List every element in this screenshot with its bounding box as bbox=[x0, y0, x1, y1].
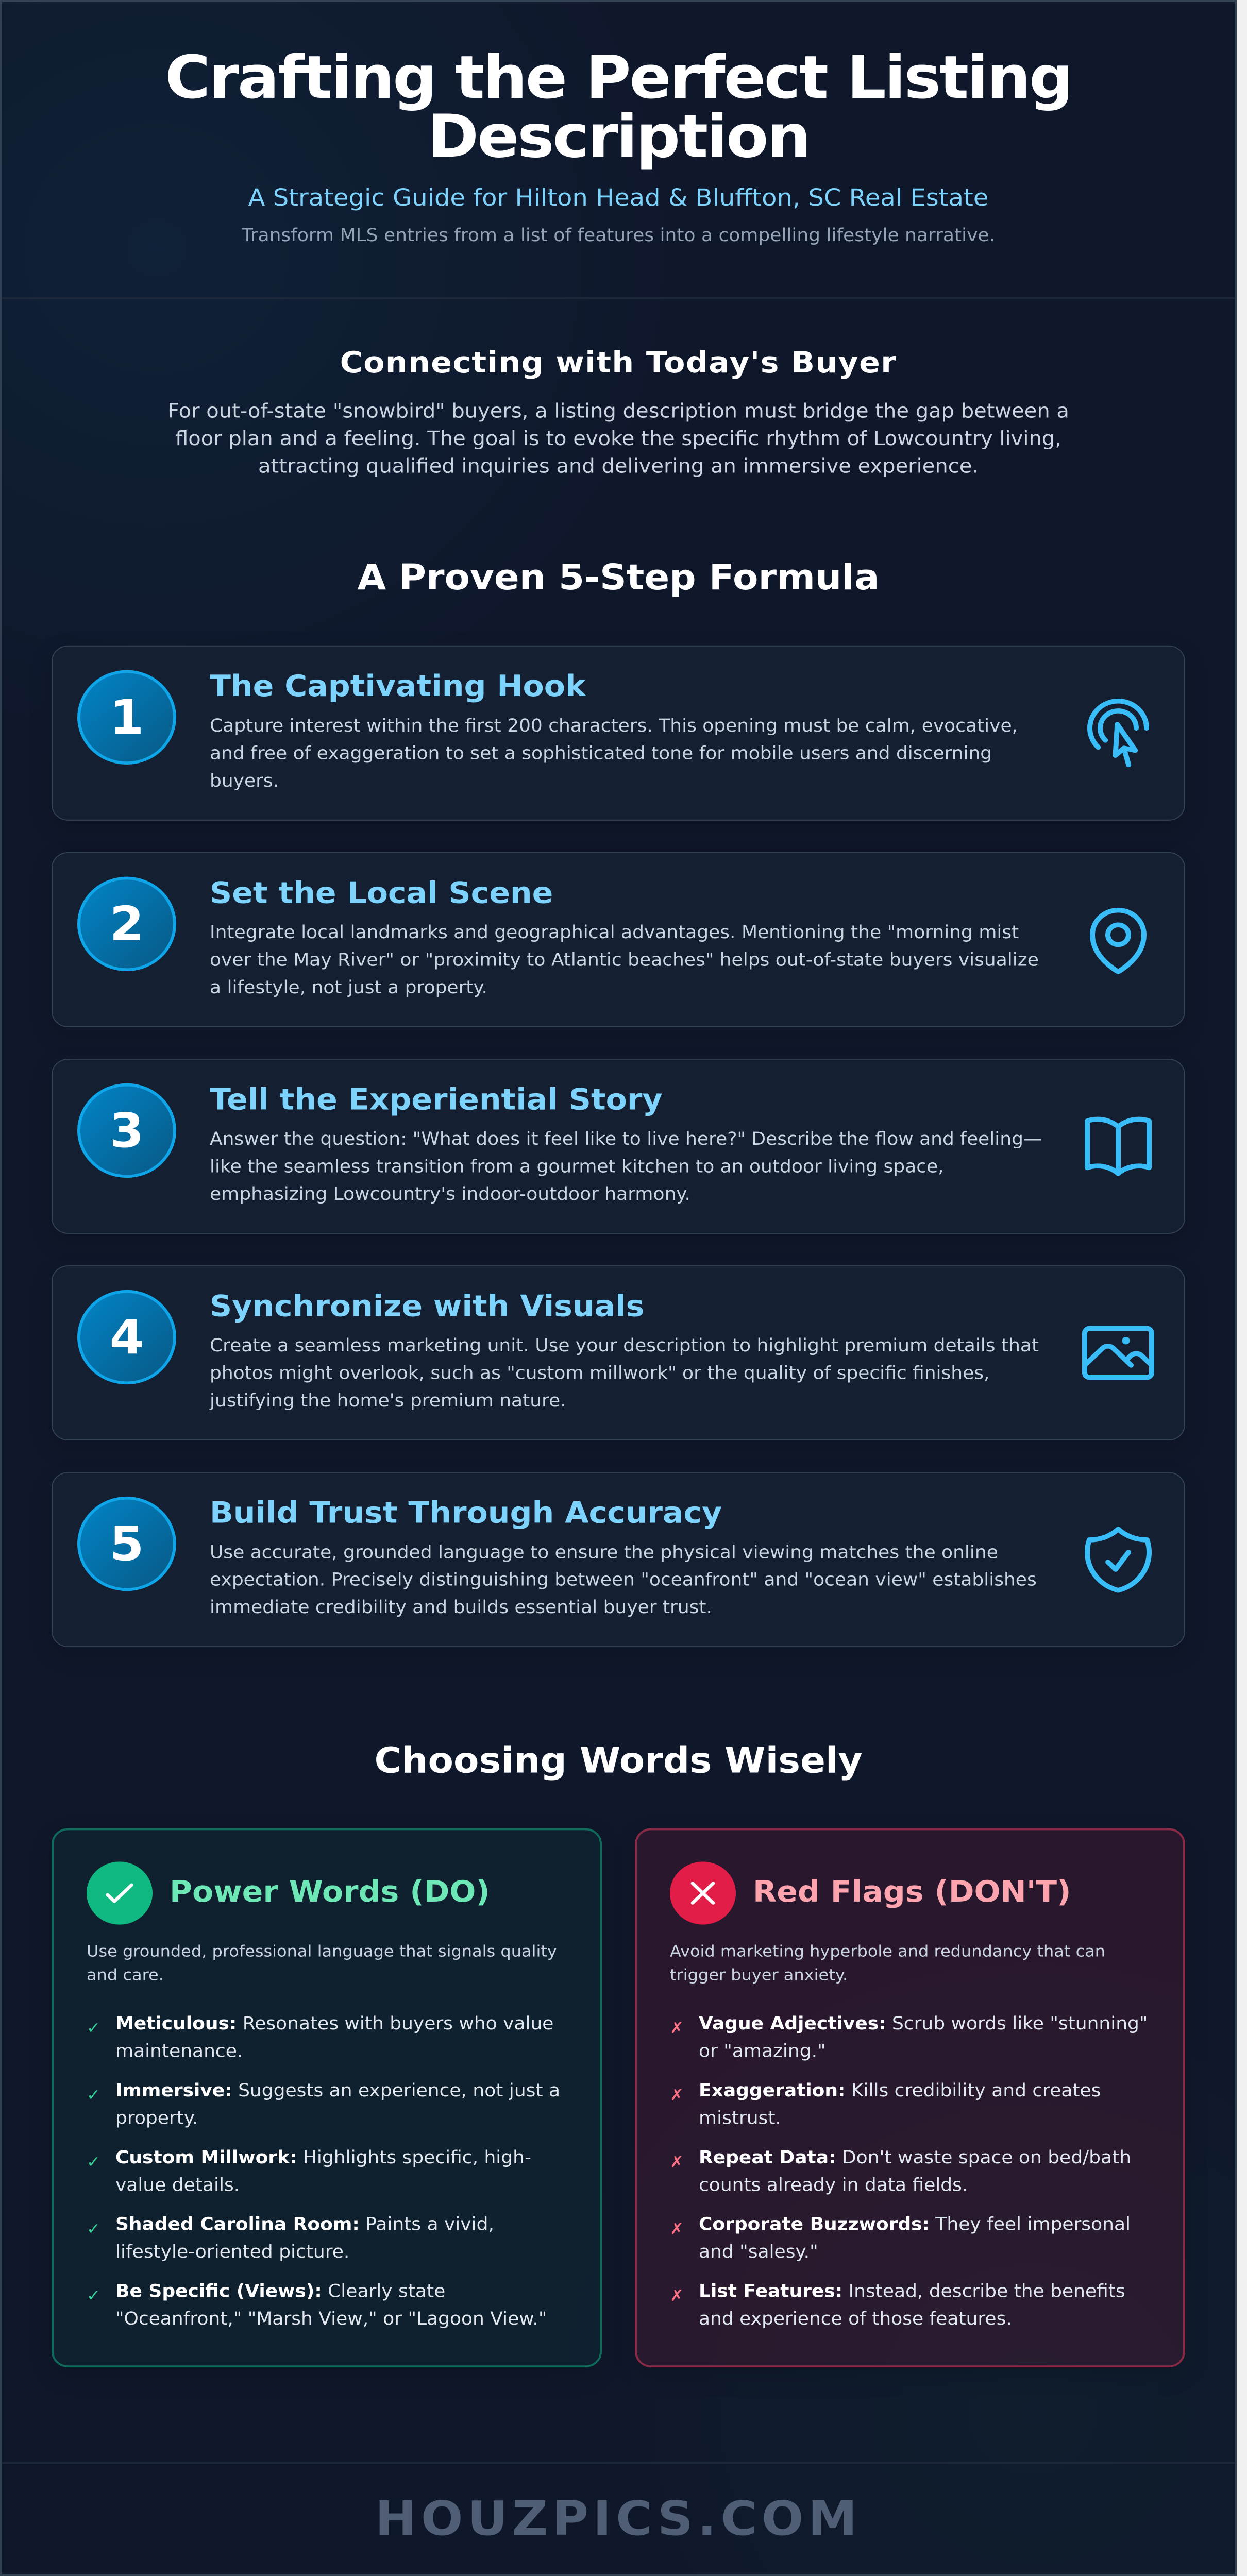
list item: custom millwork: Custom Millwork: Highlights specific, high- bbox=[115, 2147, 531, 2167]
list item: repeat data: ✗ bbox=[670, 2153, 684, 2171]
list item: corporate buzzwords: ✗ bbox=[670, 2219, 684, 2238]
step 5 title: Build Trust Through Accuracy bbox=[210, 1496, 722, 1530]
list item: be specific: ✓ bbox=[87, 2286, 100, 2305]
red flags heading: Red Flags (DON'T) bbox=[753, 1874, 1071, 1909]
list item: immersive: property. bbox=[115, 2108, 198, 2128]
list item: list features: List Features: Instead, describe the benefits bbox=[699, 2281, 1125, 2301]
list item: corporate buzzwords: Corporate Buzzwords: They feel impersonal bbox=[699, 2214, 1131, 2234]
step number 5: 5 bbox=[110, 1516, 144, 1571]
intro paragraph bbox=[167, 400, 1069, 478]
list item: immersive: ✓ bbox=[87, 2086, 100, 2104]
list item: shaded carolina room: Shaded Carolina Room: Paints a vivid, bbox=[115, 2214, 494, 2234]
step number 2: 2 bbox=[110, 896, 144, 952]
icon: photo bbox=[1082, 1326, 1154, 1380]
heading: connecting with today's buyer: Connecting with Today's Buyer bbox=[340, 345, 897, 380]
step number 4 bbox=[77, 1290, 176, 1384]
footer brand: HOUZPICS.COM bbox=[375, 2491, 862, 2546]
step 5 text: expectation. Precisely distinguishing between "oceanfront" and "ocean view" establishes bbox=[210, 1570, 1037, 1590]
heading: choosing words wisely: Choosing Words Wisely bbox=[374, 1740, 863, 1781]
list item: exaggeration: Exaggeration: Kills credibility and creates bbox=[699, 2080, 1101, 2101]
step number 4: 4 bbox=[110, 1310, 144, 1365]
list item: exaggeration: mistrust. bbox=[699, 2108, 781, 2128]
header: tagline: Transform MLS entries from a list of features into a compelling lifestyle narrative. bbox=[242, 225, 995, 246]
step 2 title: Set the Local Scene bbox=[210, 876, 553, 910]
step 5 text: Use accurate, grounded language to ensure the physical viewing matches the online bbox=[210, 1543, 998, 1563]
list item: vague adjectives: or "amazing." bbox=[699, 2041, 826, 2061]
list item: list features: ✗ bbox=[670, 2286, 684, 2305]
icon: check badge bbox=[87, 1861, 153, 1925]
panel: step 2 bbox=[52, 852, 1185, 1027]
list item: corporate buzzwords: and "salesy." bbox=[699, 2242, 818, 2262]
step number 2 bbox=[77, 877, 176, 971]
step 3 title: Tell the Experiential Story bbox=[210, 1082, 663, 1117]
list item: vague adjectives: Vague Adjectives: Scrub words like "stunning" bbox=[699, 2014, 1148, 2034]
list item: shaded carolina room bbox=[87, 2214, 494, 2262]
list item: custom millwork bbox=[87, 2147, 531, 2195]
icon: open book bbox=[1085, 1117, 1152, 1176]
list item: vague adjectives: ✗ bbox=[670, 2019, 684, 2037]
list item: repeat data bbox=[670, 2144, 1154, 2199]
list item: vague adjectives bbox=[670, 2010, 1154, 2065]
list item: list features bbox=[670, 2278, 1154, 2333]
list item: meticulous: ✓ bbox=[87, 2019, 100, 2037]
red flags description: Avoid marketing hyperbole and redundancy that can bbox=[670, 1942, 1105, 1960]
heading: 5-step formula: A Proven 5-Step Formula bbox=[357, 556, 880, 598]
step 4 text: Create a seamless marketing unit. Use your description to highlight premium details that bbox=[210, 1336, 1039, 1356]
icon: map pin bbox=[1090, 908, 1147, 974]
list item: immersive: Immersive: Suggests an experience, not just a bbox=[115, 2080, 560, 2101]
step 2 text: a lifestyle, not just a property. bbox=[210, 977, 487, 998]
step 3 text: like the seamless transition from a gourmet kitchen to an outdoor living space, bbox=[210, 1157, 944, 1177]
icon: cursor ripple bbox=[1087, 699, 1149, 768]
list item: repeat data: Repeat Data: Don't waste space on bed/bath bbox=[699, 2147, 1131, 2167]
step number 5 bbox=[77, 1497, 176, 1591]
header: title block: Crafting the Perfect Listing bbox=[165, 44, 1072, 112]
step 4 title: Synchronize with Visuals bbox=[210, 1289, 644, 1324]
step 5 text: immediate credibility and builds essential buyer trust. bbox=[210, 1598, 712, 1618]
step 1 text bbox=[210, 716, 1018, 791]
list item: meticulous: maintenance. bbox=[115, 2041, 243, 2061]
header: title block bbox=[165, 44, 1072, 171]
step 1 text: buyers. bbox=[210, 771, 279, 791]
list item: be specific bbox=[87, 2278, 571, 2333]
list item: custom millwork: value details. bbox=[115, 2175, 240, 2195]
list item: custom millwork: ✓ bbox=[87, 2153, 100, 2171]
header: subtitle: A Strategic Guide for Hilton Head & Bluffton, SC Real Estate bbox=[248, 184, 988, 212]
list item: repeat data: counts already in data fields. bbox=[699, 2175, 968, 2195]
intro paragraph: For out-of-state "snowbird" buyers, a listing description must bridge the gap between a bbox=[167, 400, 1069, 422]
step 1 text: and free of exaggeration to set a sophisticated tone for mobile users and discerning bbox=[210, 743, 992, 764]
list item: exaggeration: ✗ bbox=[670, 2086, 684, 2104]
power words heading: Power Words (DO) bbox=[170, 1874, 490, 1909]
panel: step 5 bbox=[52, 1472, 1185, 1647]
list item: be specific: "Oceanfront," "Marsh View," or "Lagoon View." bbox=[115, 2309, 547, 2329]
step 5 text bbox=[210, 1543, 1037, 1618]
step 2 text bbox=[210, 922, 1039, 998]
step number 3: 3 bbox=[110, 1103, 144, 1158]
step 4 text: photos might overlook, such as "custom millwork" or the quality of specific finishes, bbox=[210, 1363, 989, 1383]
list item: shaded carolina room: lifestyle-oriented picture. bbox=[115, 2242, 349, 2262]
step 2 text: over the May River" or "proximity to Atlantic beaches" helps out-of-state buyers visualize bbox=[210, 950, 1039, 970]
intro paragraph: floor plan and a feeling. The goal is to evoke the specific rhythm of Lowcountry living, bbox=[175, 428, 1061, 450]
red flags description bbox=[670, 1939, 1105, 1987]
panel: step 3 bbox=[52, 1059, 1185, 1234]
list item: list features: and experience of those features. bbox=[699, 2309, 1012, 2329]
panel: red flags bbox=[635, 1828, 1185, 2367]
panel: power words bbox=[52, 1828, 602, 2367]
step 4 text: justifying the home's premium nature. bbox=[210, 1391, 566, 1411]
list item: meticulous bbox=[87, 2014, 553, 2061]
step 1 text: Capture interest within the first 200 characters. This opening must be calm, evocative, bbox=[210, 716, 1018, 736]
panel: step 4 bbox=[52, 1265, 1185, 1440]
list item: immersive bbox=[87, 2080, 560, 2128]
step 1 title: The Captivating Hook bbox=[210, 669, 586, 704]
icon: shield check bbox=[1085, 1527, 1152, 1593]
step 2 text: Integrate local landmarks and geographical advantages. Mentioning the "morning mist bbox=[210, 922, 1019, 943]
panel: step 1 bbox=[52, 646, 1185, 821]
step 3 text bbox=[210, 1129, 1042, 1205]
list item: meticulous: Meticulous: Resonates with buyers who value bbox=[115, 2014, 553, 2034]
intro paragraph: attracting qualified inquiries and delivering an immersive experience. bbox=[258, 455, 979, 478]
power words description: and care. bbox=[87, 1965, 164, 1984]
step 4 text bbox=[209, 1336, 1039, 1411]
power words description: Use grounded, professional language that signals quality bbox=[87, 1942, 557, 1960]
red flags description: trigger buyer anxiety. bbox=[670, 1965, 848, 1984]
list item: corporate buzzwords bbox=[670, 2211, 1154, 2266]
icon: cross badge bbox=[670, 1861, 736, 1925]
step number 3 bbox=[77, 1083, 176, 1178]
list item: exaggeration bbox=[670, 2077, 1154, 2132]
step number 1 bbox=[77, 670, 176, 765]
list item: shaded carolina room: ✓ bbox=[87, 2219, 100, 2238]
step 3 text: emphasizing Lowcountry's indoor-outdoor harmony. bbox=[210, 1184, 690, 1205]
step 3 text: Answer the question: "What does it feel like to live here?" Describe the flow and feeling— bbox=[210, 1129, 1042, 1149]
header: title block: Description bbox=[428, 103, 809, 171]
list item: be specific: Be Specific (Views): Clearly state bbox=[115, 2281, 445, 2301]
step number 1: 1 bbox=[110, 690, 144, 745]
power words description bbox=[87, 1942, 557, 1984]
